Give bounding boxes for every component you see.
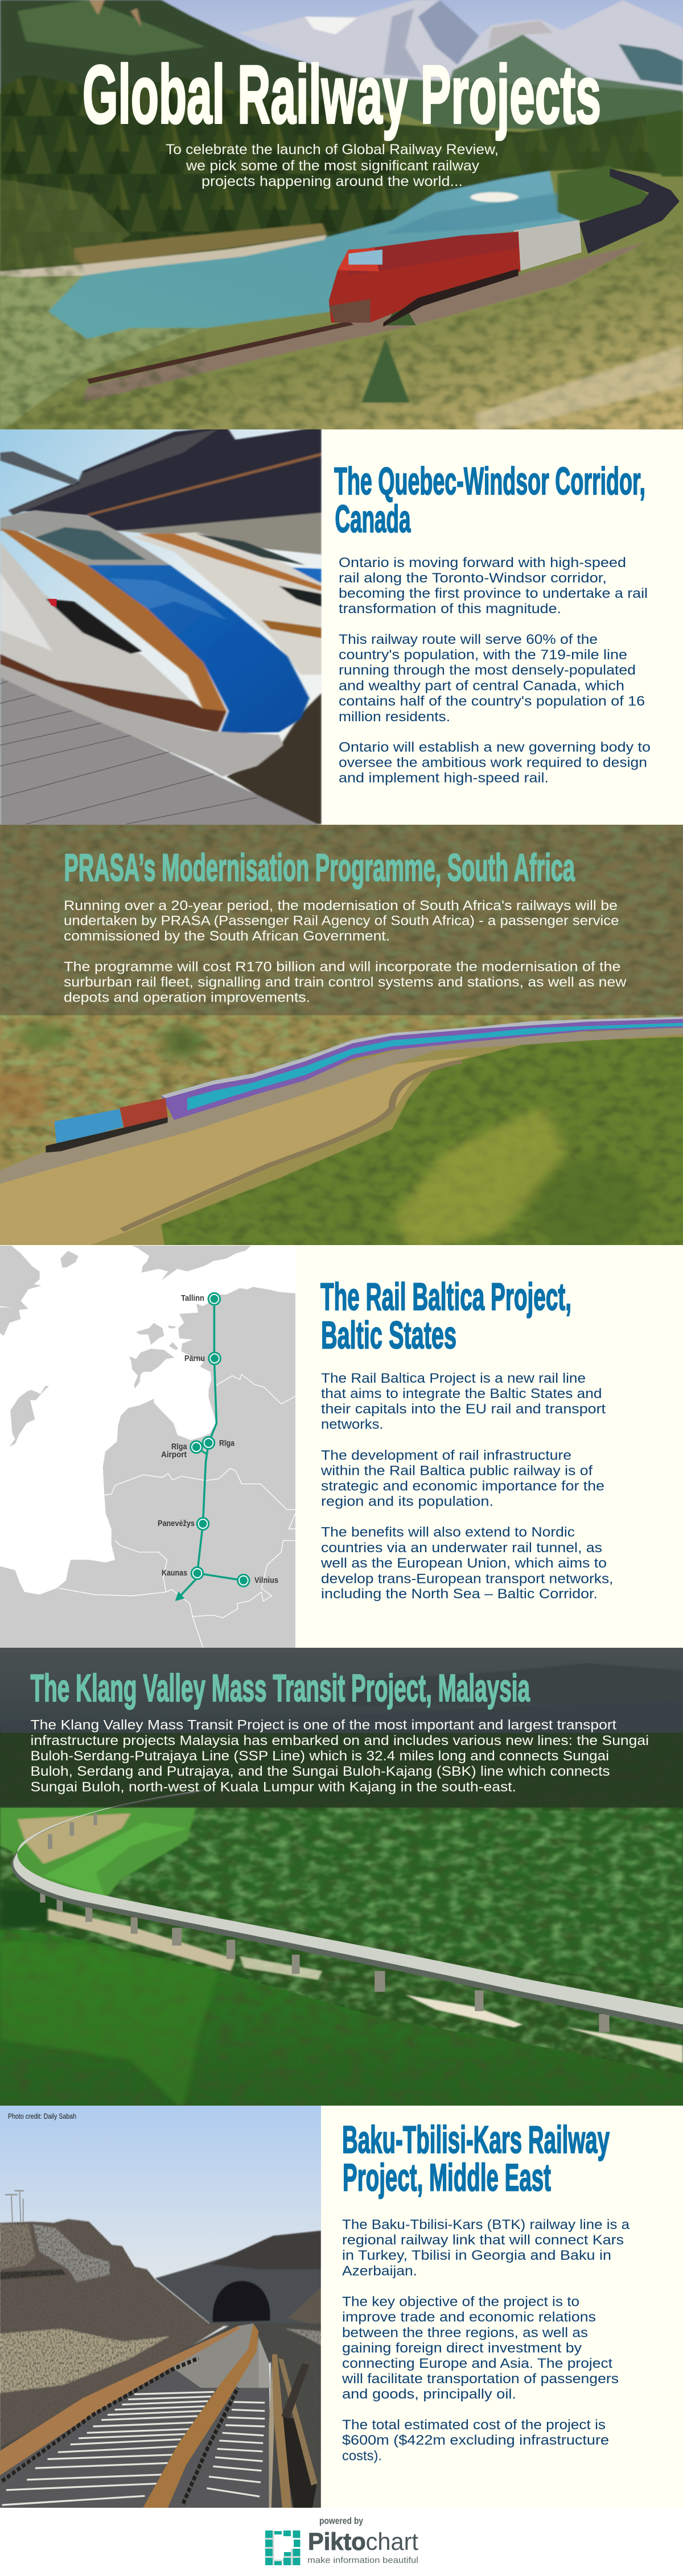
body text: and implement high-speed rail. [339, 770, 549, 786]
text panel [334, 460, 651, 786]
body text: rail along the Toronto-Windsor corridor, [339, 570, 607, 586]
subtitle [166, 142, 499, 189]
panel: Quebec-Windsor Corridor [0, 429, 683, 825]
heading [320, 1275, 571, 1357]
body text: becoming the first province to undertake a rail [339, 586, 648, 601]
body text: undertaken by PRASA (Passenger Rail Agency of South Africa) - a passenger service [64, 913, 619, 928]
body text: region and its population. [321, 1494, 493, 1510]
map labels: Kaunas [162, 1569, 187, 1578]
body text: infrastructure projects Malaysia has embarked on and includes various new lines: the Sungai [31, 1733, 649, 1748]
body text: networks. [321, 1417, 384, 1432]
body text [320, 1371, 614, 1602]
body text: Ontario will establish a new governing body to [339, 739, 651, 755]
map labels: Rīga [171, 1442, 187, 1452]
body text: improve trade and economic relations [342, 2309, 596, 2325]
dark scrim behind text [0, 825, 683, 1015]
body text: $600m ($422m excluding infrastructure [342, 2433, 609, 2448]
body text: will facilitate transportation of passengers [342, 2371, 619, 2387]
map labels: Airport [161, 1450, 187, 1459]
body text: well as the European Union, which aims to [320, 1556, 607, 1571]
body text: develop trans-European transport networks, [321, 1571, 614, 1587]
body text: that aims to integrate the Baltic States and [321, 1386, 602, 1401]
body text: commissioned by the South African Government. [64, 928, 390, 944]
dark scrim behind text [0, 1648, 683, 1808]
body text: The Baku-Tbilisi-Kars (BTK) railway line is a [342, 2217, 630, 2232]
map labels: Tallinn [181, 1294, 204, 1303]
body text: This railway route will serve 60% of the [339, 632, 598, 647]
icon: Piktochart logo [265, 2530, 301, 2565]
heading [342, 2118, 610, 2199]
map labels: Rīga [219, 1439, 235, 1448]
body text: countries via an underwater rail tunnel, as [321, 1540, 602, 1556]
heading [334, 460, 645, 540]
photo: freight train by a mountain river [0, 0, 683, 429]
body text: The Klang Valley Mass Transit Project is one of the most important and largest transport [31, 1718, 616, 1733]
body text: The development of rail infrastructure [321, 1448, 571, 1463]
body text: transformation of this magnitude. [339, 601, 561, 617]
body text: including the North Sea – Baltic Corridor. [321, 1586, 598, 1602]
body text: The programme will cost R170 billion and will incorporate the modernisation of the [64, 959, 620, 975]
text overlay [64, 846, 627, 1006]
photo: elevated viaduct through forest [0, 1648, 683, 2106]
map labels: Panevėžys [158, 1519, 195, 1528]
body text: costs). [342, 2448, 382, 2464]
body text: running through the most densely-populated [339, 663, 636, 678]
body text: strategic and economic importance for the [321, 1479, 604, 1494]
body text: gaining foreign direct investment by [342, 2341, 582, 2356]
body text: surburban rail fleet, signalling and train control systems and stations, as well as new [64, 975, 627, 990]
body text: The key objective of the project is to [342, 2294, 579, 2309]
body text [339, 555, 651, 786]
body text: Ontario is moving forward with high-speed [339, 555, 626, 570]
body text: in Turkey, Tbilisi in Georgia and Baku in [342, 2248, 611, 2263]
body text [31, 1718, 649, 1795]
body text: country's population, with the 719-mile line [339, 647, 627, 663]
body text [342, 2217, 630, 2464]
wordmark: make information beautiful [307, 2556, 418, 2565]
panel: PRASA Modernisation Programme [0, 825, 683, 1609]
body text: and goods, principally oil. [342, 2387, 516, 2402]
body text: connecting Europe and Asia. The project [342, 2356, 612, 2371]
body text [64, 898, 627, 1006]
photo: high-speed train [0, 429, 322, 825]
photo: railway track to a tunnel [0, 2106, 321, 2508]
body text: Buloh-Serdang-Putrajaya Line (SSP Line) which is 32.4 miles long and connects Sungai [31, 1748, 609, 1764]
body text: depots and operation improvements. [64, 990, 310, 1006]
body text: million residents. [339, 709, 450, 725]
subtitle: we pick some of the most significant railway [186, 158, 480, 174]
body text: contains half of the country's population of 16 [339, 694, 645, 709]
body text: Running over a 20-year period, the modernisation of South Africa's railways will be [64, 898, 618, 913]
map labels: Vilnius [254, 1576, 278, 1585]
body text: oversee the ambitious work required to design [339, 755, 647, 770]
text panel [158, 1275, 614, 1602]
wordmark: Piktochart [308, 2528, 418, 2556]
heading: Canada [335, 497, 411, 540]
subtitle: To celebrate the launch of Global Railway Review, [166, 142, 499, 158]
panel: Klang Valley Mass Transit Project [0, 1648, 683, 2463]
body text: between the three regions, as well as [342, 2325, 588, 2341]
body text: their capitals into the EU rail and transport [321, 1401, 606, 1417]
body text: Buloh, Serdang and Putrajaya, and the Sungai Buloh-Kajang (SBK) line which connects [31, 1764, 610, 1779]
body text: Sungai Buloh, north-west of Kuala Lumpur with Kajang in the south-east. [31, 1779, 516, 1795]
map labels: Pärnu [184, 1354, 205, 1363]
panel: Baku-Tbilisi-Kars Railway Project [0, 2106, 683, 2508]
footer: Piktochart credit [0, 2508, 683, 2576]
body text: within the Rail Baltica public railway is of [320, 1463, 593, 1479]
body text: The benefits will also extend to Nordic [321, 1524, 575, 1540]
body text: The Rail Baltica Project is a new rail line [321, 1371, 586, 1386]
panel: hero [0, 0, 683, 429]
photo credit: Photo credit: Daily Sabah [8, 2112, 76, 2120]
body text: regional railway link that will connect Kars [342, 2232, 624, 2248]
map: Rail Baltica route [0, 1246, 295, 1648]
heading: Baltic States [321, 1314, 456, 1357]
body text: Azerbaijan. [342, 2264, 417, 2279]
powered by: powered by [319, 2516, 364, 2527]
body text: and wealthy part of central Canada, which [339, 678, 624, 694]
text overlay [83, 48, 601, 189]
photo: train on a hillside [0, 825, 683, 1245]
panel: Rail Baltica Project [0, 1245, 683, 1648]
subtitle: projects happening around the world... [201, 173, 463, 189]
map labels [158, 1294, 278, 1585]
body text: The total estimated cost of the project is [342, 2417, 606, 2433]
